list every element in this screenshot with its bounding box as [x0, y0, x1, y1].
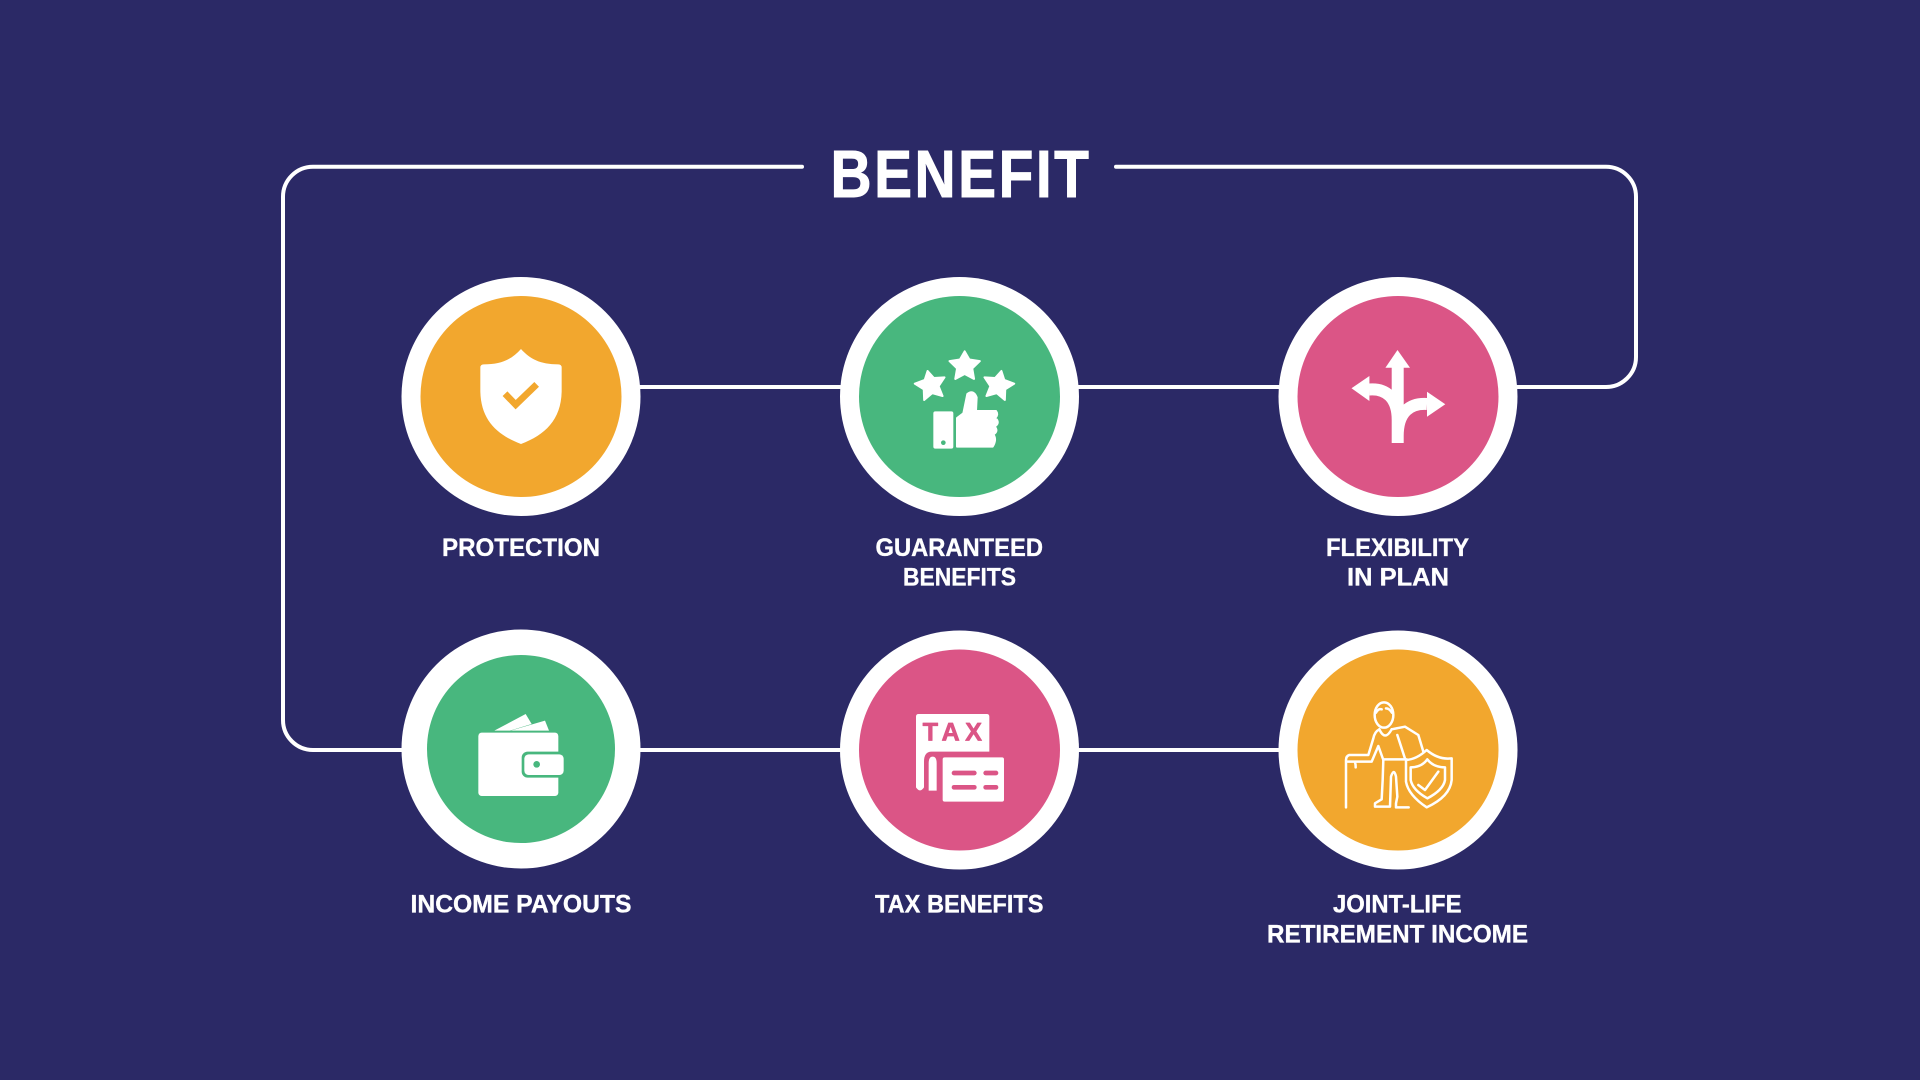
icon: wallet [478, 714, 565, 796]
label: guaranteed benefits: GUARANTEED [876, 534, 1043, 562]
panel: protection [402, 277, 640, 562]
panel: joint-life retirement income [1267, 630, 1528, 948]
icon: stars and thumbs up [913, 351, 1016, 448]
label: joint-life retirement income: JOINT-LIFE [1333, 890, 1462, 918]
panel: guaranteed benefits [840, 277, 1079, 592]
icon: tax forms: TAX [923, 719, 982, 747]
guaranteed ring and disc [840, 277, 1079, 516]
panel: flexibility in plan [1278, 277, 1518, 592]
protection ring and disc [402, 277, 640, 516]
label: joint-life retirement income: RETIREMENT INCOME [1267, 920, 1528, 948]
joint-life ring and disc [1278, 630, 1518, 870]
flexibility ring and disc [1278, 277, 1518, 516]
label: flexibility in plan: IN PLAN [1347, 564, 1449, 592]
label: guaranteed benefits [876, 534, 1043, 592]
icon: branching arrows [1352, 350, 1445, 443]
title: BENEFIT [830, 138, 1089, 212]
icon: shield with check [480, 349, 562, 444]
icon: tax forms [916, 714, 1004, 802]
label: protection: PROTECTION [442, 534, 600, 562]
panel: tax benefits [840, 630, 1079, 918]
label: income payouts: INCOME PAYOUTS [410, 890, 632, 918]
connector frame and lines [283, 167, 1636, 750]
label: tax benefits: TAX BENEFITS [875, 890, 1044, 918]
panel: income payouts [402, 630, 640, 918]
income ring and disc [402, 630, 640, 868]
label: flexibility in plan: FLEXIBILITY [1326, 534, 1469, 562]
label: joint-life retirement income [1267, 890, 1528, 948]
tax ring and disc [840, 630, 1079, 870]
icon: elderly person with shield [1346, 702, 1452, 807]
label: flexibility in plan [1326, 534, 1469, 592]
label: guaranteed benefits: BENEFITS [903, 564, 1016, 592]
